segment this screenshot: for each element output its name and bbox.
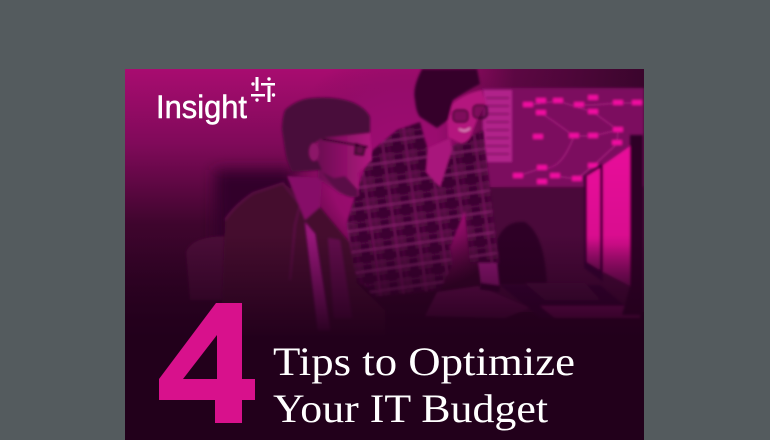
man glasses — [322, 139, 368, 155]
man neck — [287, 176, 322, 220]
man — [222, 98, 385, 335]
man hair — [282, 98, 370, 172]
Insight logo — [156, 77, 275, 125]
chairs — [186, 222, 547, 300]
woman hair — [414, 69, 480, 128]
woman glasses — [453, 105, 487, 122]
title line 2: Your IT Budget — [273, 386, 548, 431]
logo wordmark: Insight — [156, 89, 247, 125]
infographic cover — [125, 69, 644, 440]
title line 1: Tips to Optimize — [273, 339, 575, 384]
bottom fade — [125, 235, 644, 340]
logo symbol — [251, 77, 275, 102]
man shirt strip — [305, 222, 330, 330]
big number 4 — [159, 303, 255, 423]
woman face — [447, 90, 486, 143]
man hood highlight — [225, 183, 300, 280]
desk and keyboard — [500, 283, 640, 318]
man face — [318, 132, 372, 196]
man ear — [309, 143, 319, 161]
wall below display — [488, 187, 644, 302]
woman forearm — [478, 263, 500, 290]
woman neck — [426, 138, 452, 187]
title — [273, 339, 575, 431]
woman — [347, 69, 530, 318]
man beard — [322, 172, 358, 197]
man sleeve plaid — [347, 226, 374, 283]
dark column behind man — [215, 170, 295, 260]
woman shirt — [347, 122, 500, 297]
photo panel — [125, 45, 644, 440]
wall display network map — [482, 88, 644, 187]
hands and watch — [425, 286, 530, 318]
man hoodie — [224, 182, 366, 303]
monitors — [584, 135, 643, 315]
